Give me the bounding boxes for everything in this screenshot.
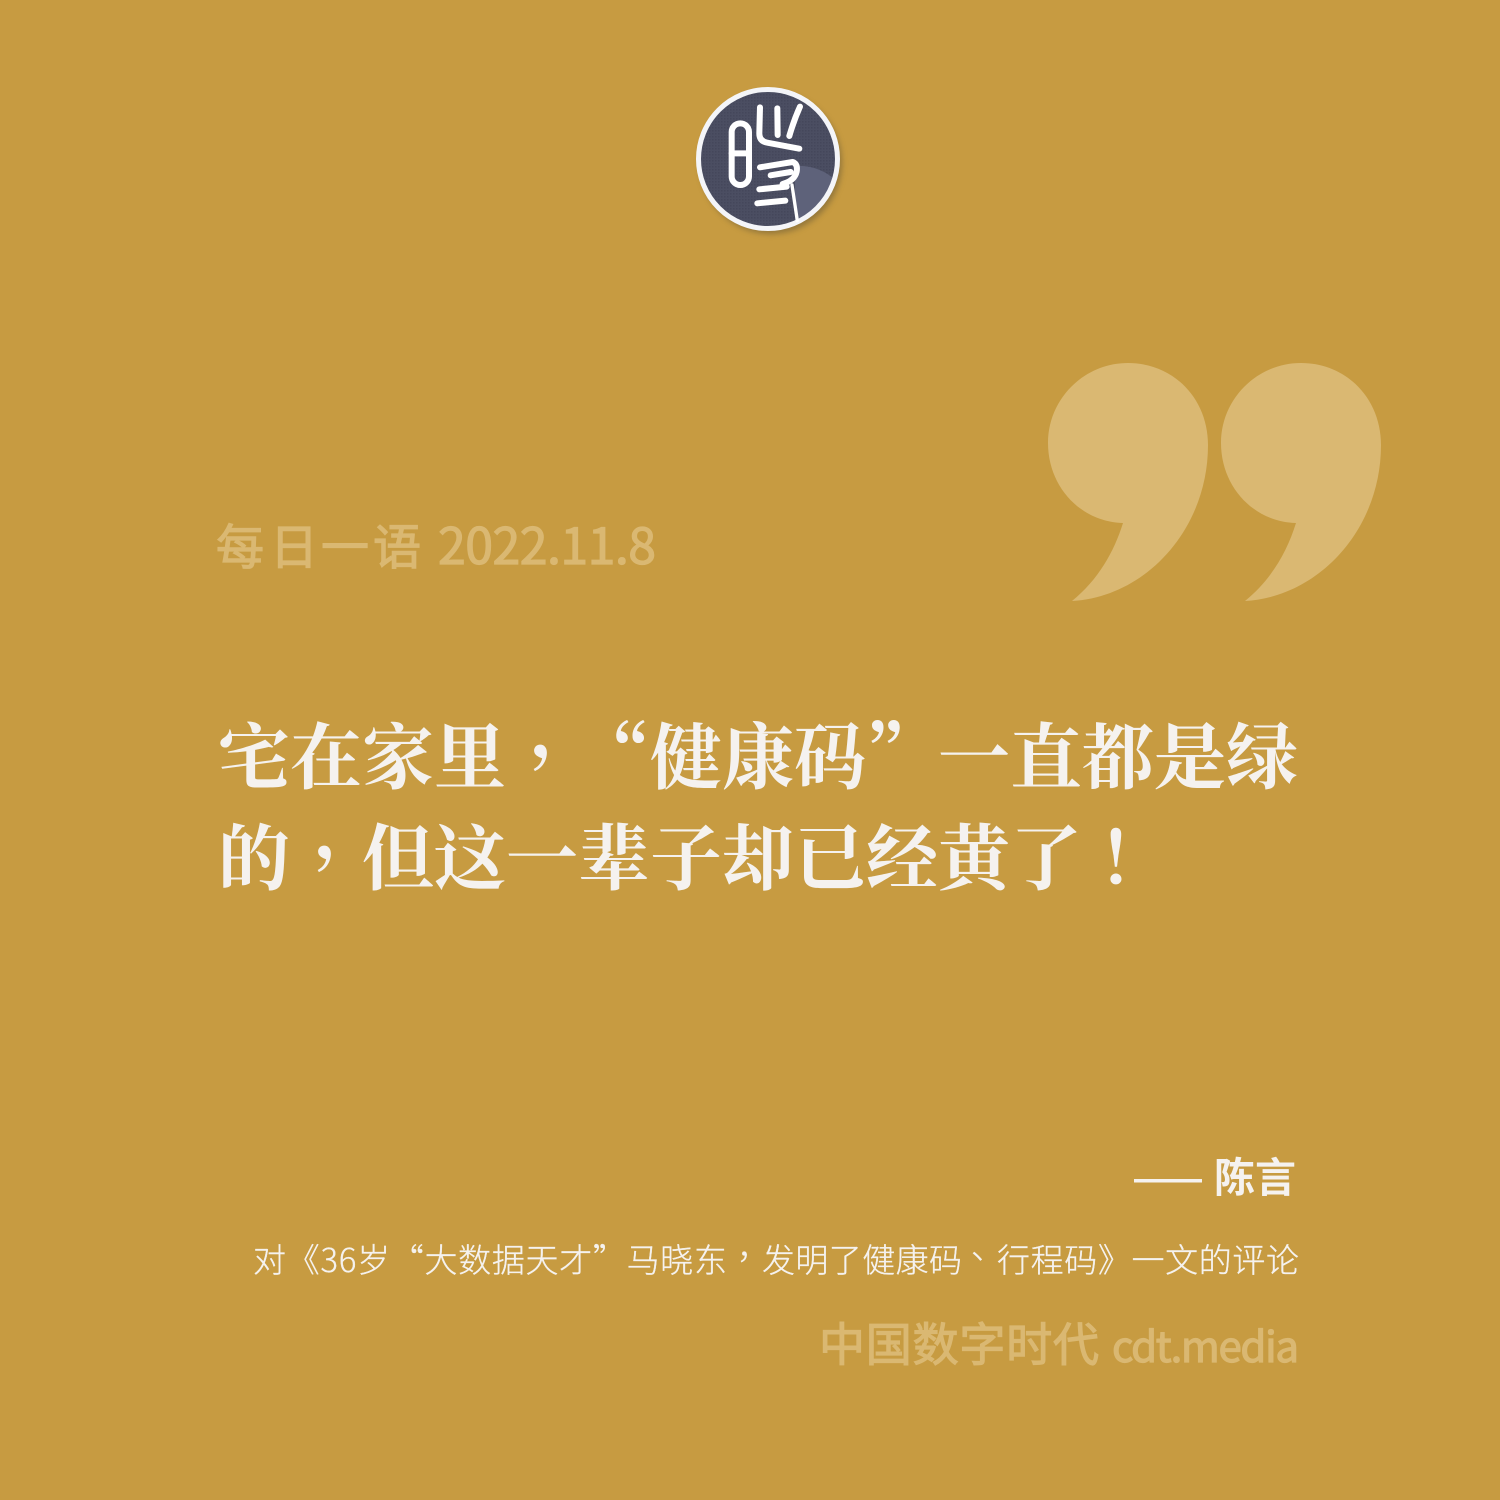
icon: round seal logo [697,88,842,240]
source note: 行程码》一文的评论 [997,1234,1299,1282]
attribution [1134,1144,1296,1204]
decorative closing quotation mark [1048,363,1381,601]
main quote [218,672,1298,905]
main quote: 宅在家里，“健康码”一直都是绿 [218,672,1298,804]
source note: ， [737,1221,770,1269]
date heading: 每日一语 [216,508,421,578]
footer site name [819,1309,1299,1375]
main quote: 的，但这一辈子却已经黄了！ [218,773,1170,905]
source note [253,1221,1299,1282]
date heading: 2022.11.8 [438,507,656,579]
footer site name: 中国数字时代 [819,1309,1099,1375]
source note: 发明了健康码 [762,1234,962,1282]
date heading [216,507,656,579]
source note: 、 [971,1221,1004,1269]
attribution: 陈言 [1214,1144,1296,1204]
footer site name: cdt.media [1112,1314,1299,1375]
source note: 对《36岁“大数据天才”马晓东 [253,1234,727,1282]
